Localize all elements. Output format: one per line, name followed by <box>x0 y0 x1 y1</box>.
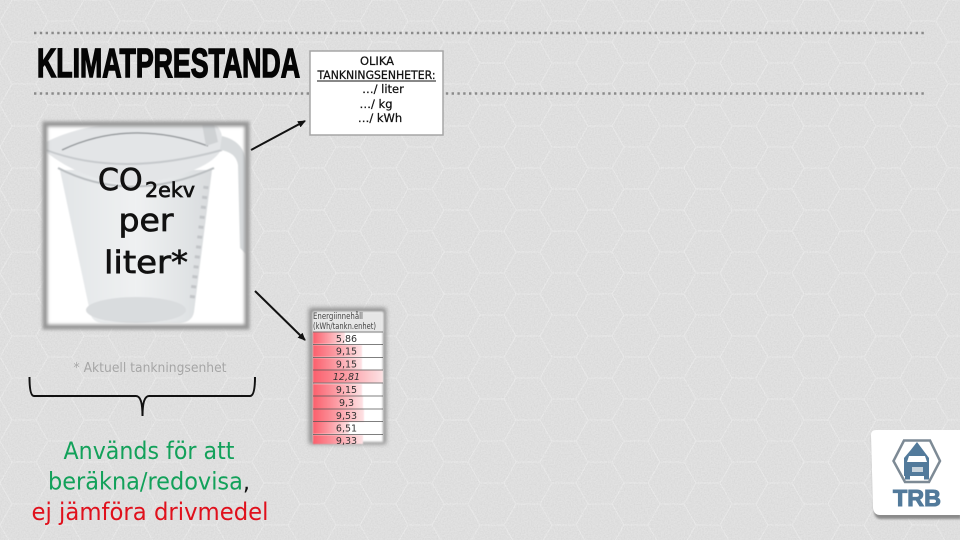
icon: cup body <box>46 124 246 323</box>
panel: measuring cup <box>45 124 247 327</box>
conclusion text: beräkna/redovisa, <box>48 468 250 496</box>
cup frame <box>45 124 247 327</box>
callout: olika tankningsenheter: …/ liter <box>362 82 404 96</box>
table values: 9,15 <box>336 385 357 396</box>
cup label: liter* <box>104 245 188 281</box>
callout: olika tankningsenheter: …/ kg <box>360 97 392 111</box>
table values: 6,51 <box>336 424 357 434</box>
row lines <box>313 332 383 434</box>
callout: olika tankningsenheter: …/ kWh <box>358 111 402 125</box>
table values <box>333 334 360 447</box>
callout: olika tankningsenheter: TANKNINGSENHETER: <box>317 68 436 82</box>
data bars <box>313 332 383 444</box>
brace <box>30 377 255 416</box>
table values: 5,86 <box>336 334 357 345</box>
cup label: per <box>118 203 174 239</box>
table header: Energiinnehåll <box>313 311 363 322</box>
table values: 9,33 <box>336 436 357 447</box>
conclusion text <box>32 437 268 526</box>
conclusion text: ej jämföra drivmedel <box>32 498 268 526</box>
table values: 9,3 <box>339 398 354 409</box>
callout: olika tankningsenheter <box>310 51 443 135</box>
cup label: CO <box>98 163 143 198</box>
cup label: 2ekv <box>145 178 195 202</box>
dotted rule top <box>34 32 924 34</box>
arrow to table <box>255 291 305 340</box>
footnote: * Aktuell tankningsenhet <box>74 361 226 376</box>
icon: hexagon with drop and car <box>894 440 940 482</box>
logo text: TRB <box>893 485 941 511</box>
title: KLIMATPRESTANDA <box>37 40 300 86</box>
dotted rule bottom <box>34 92 924 95</box>
table: energy content <box>309 308 386 447</box>
table header <box>313 311 376 332</box>
table values: 9,15 <box>336 346 357 358</box>
logo: TRB <box>871 430 960 519</box>
table values: 9,53 <box>336 411 357 422</box>
conclusion text: Används för att <box>64 437 234 465</box>
cup label <box>98 163 195 281</box>
arrow to callout <box>251 121 305 150</box>
table values: 12,81 <box>333 372 360 383</box>
table values: 9,15 <box>336 360 357 370</box>
table header: (kWh/tankn.enhet) <box>313 322 376 332</box>
callout: olika tankningsenheter: OLIKA <box>360 54 394 68</box>
